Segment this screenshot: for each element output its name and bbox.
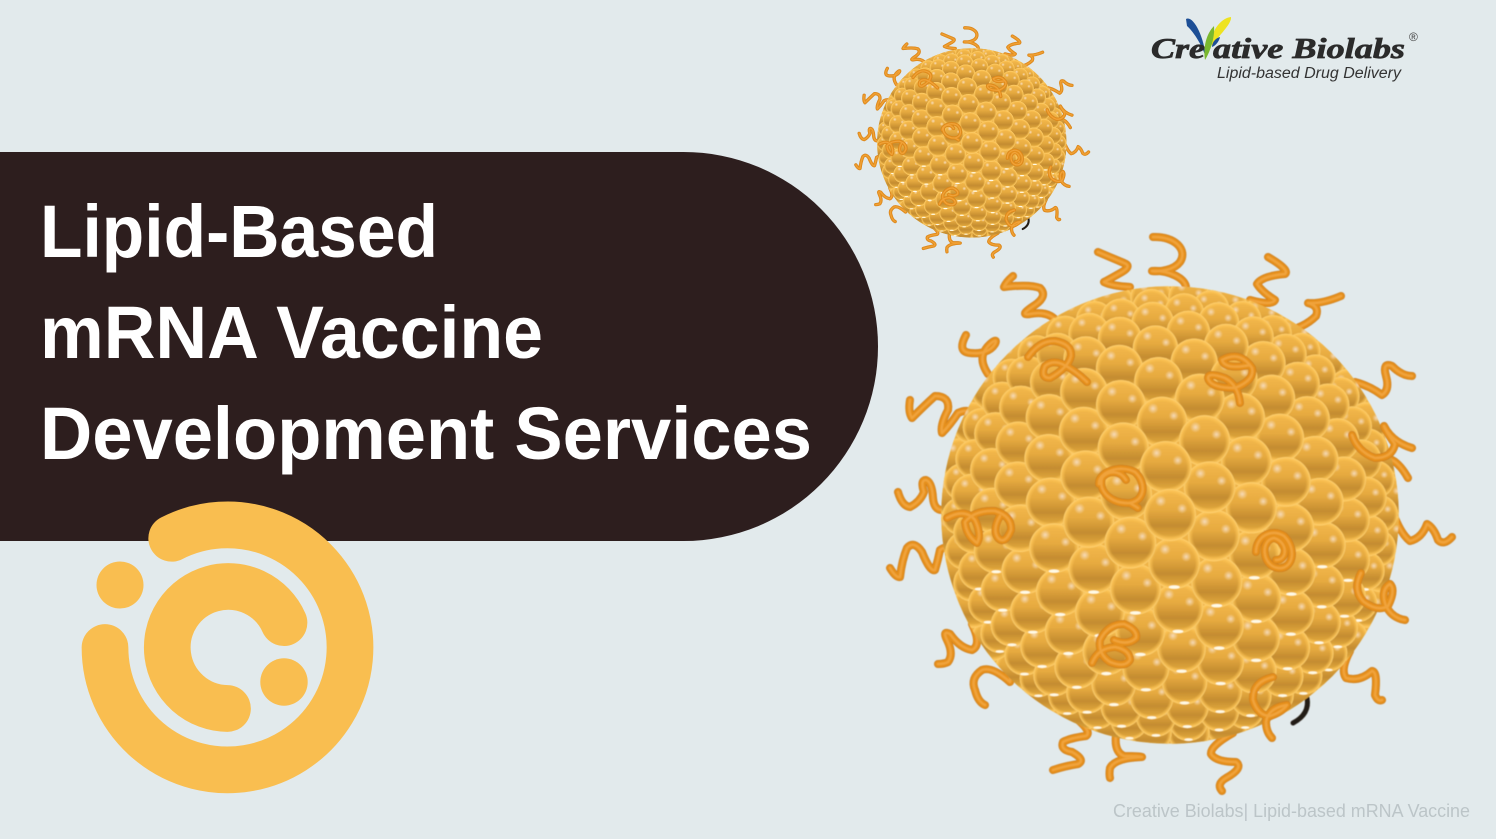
outer mRNA strands [890, 237, 1452, 791]
footer caption: Creative Biolabs| Lipid-based mRNA Vaccine [1113, 801, 1470, 821]
surface mRNA strands [947, 341, 1412, 738]
title: mRNA Vaccine [40, 291, 543, 374]
illustration: small lipid nanoparticle [837, 8, 1107, 278]
illustration: large lipid nanoparticle [844, 189, 1496, 839]
registered mark: ® [1409, 30, 1418, 44]
title panel: dark pill [0, 152, 878, 541]
icon: circular yellow emblem [96, 525, 350, 770]
logo wordmark [1151, 34, 1405, 65]
nanoparticle core of lipid beads [877, 48, 1400, 745]
title: Development Services [40, 392, 812, 475]
title: Lipid-Based [40, 190, 438, 273]
logo wordmark: ative Biolabs [1213, 34, 1405, 65]
title [40, 190, 812, 475]
logo tagline: Lipid-based Drug Delivery [1217, 65, 1402, 82]
logo leaves [1186, 17, 1231, 60]
logo: Creative Biolabs [1151, 17, 1418, 82]
logo wordmark: Cre [1151, 34, 1205, 65]
